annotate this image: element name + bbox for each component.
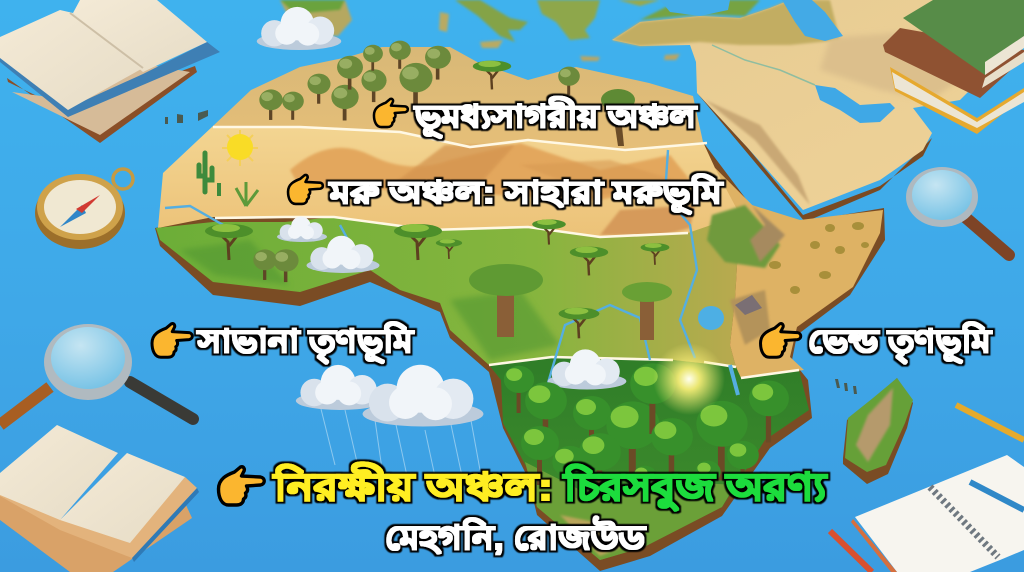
label: desert region: মরু অঞ্চল: সাহারা মরুভূমি: [329, 173, 724, 215]
label: Mediterranean region: [374, 96, 698, 139]
zone boundaries: [213, 127, 799, 378]
continent base: [155, 142, 885, 571]
zone: equatorial forest: [489, 357, 809, 560]
ocean rain cloud: [296, 365, 483, 500]
map: Africa: [155, 47, 885, 571]
Madagascar: [843, 378, 913, 484]
label: savanna grassland: [152, 321, 414, 364]
icon: notebook bottom-right: [851, 455, 1024, 572]
icon: open book bottom-left: [0, 425, 199, 572]
savanna shading: [180, 240, 560, 360]
Arabia relief: [705, 100, 810, 205]
zone: Sahara desert: [158, 126, 752, 237]
cracked earth: [600, 205, 695, 236]
icon: pencils: [830, 405, 1024, 572]
Caspian Sea: [782, 0, 843, 41]
label: desert region: [288, 173, 724, 215]
dunes: [290, 143, 690, 200]
zone: Mediterranean: [213, 47, 703, 150]
Lake Victoria: [698, 306, 724, 330]
label: tree species: মেহগনি, রোজউড: [385, 516, 647, 556]
Ethiopian highlands: [707, 205, 780, 268]
label: veld grassland: ভেল্ড তৃণভূমি: [808, 321, 992, 364]
label: equatorial region: চিরসবুজ অরণ্য: [562, 464, 828, 512]
zone: savanna grassland: [156, 215, 740, 367]
rainforest canopy: [504, 363, 789, 503]
label: equatorial region: [218, 462, 828, 512]
icon: magnifier right: [906, 167, 1009, 255]
zone: East Africa veld: [715, 168, 883, 378]
label: savanna grassland: সাভানা তৃণভূমি: [197, 321, 414, 364]
label: equatorial region: নিরক্ষীয় অঞ্চল:: [272, 462, 553, 509]
rivers: [165, 150, 738, 395]
map: Turkey, Middle East and Arabian Peninsula: [612, 0, 1000, 222]
veld shrubs: [769, 222, 869, 294]
Mediterranean trees: [259, 41, 635, 146]
map: southern Europe: [280, 0, 680, 61]
Persian Gulf: [815, 85, 895, 123]
icon: book stack top-right: [883, 0, 1024, 134]
icon: open book top-left: [0, 0, 220, 143]
Black Sea: [660, 0, 730, 16]
sun and cactus in desert: [199, 130, 258, 206]
icon: small islands: [165, 110, 857, 394]
sun glare over forest: [653, 343, 725, 415]
label: Mediterranean region: ভূমধ্যসাগরীয় অঞ্চল: [414, 96, 698, 139]
icon: compass: [35, 169, 133, 249]
southern tip: [525, 462, 735, 560]
savanna trees: [205, 219, 672, 340]
clouds over land: [257, 7, 626, 389]
icon: magnifier left: [0, 324, 193, 425]
Iraq rivers: [712, 45, 815, 85]
label: veld grassland: [761, 321, 992, 364]
